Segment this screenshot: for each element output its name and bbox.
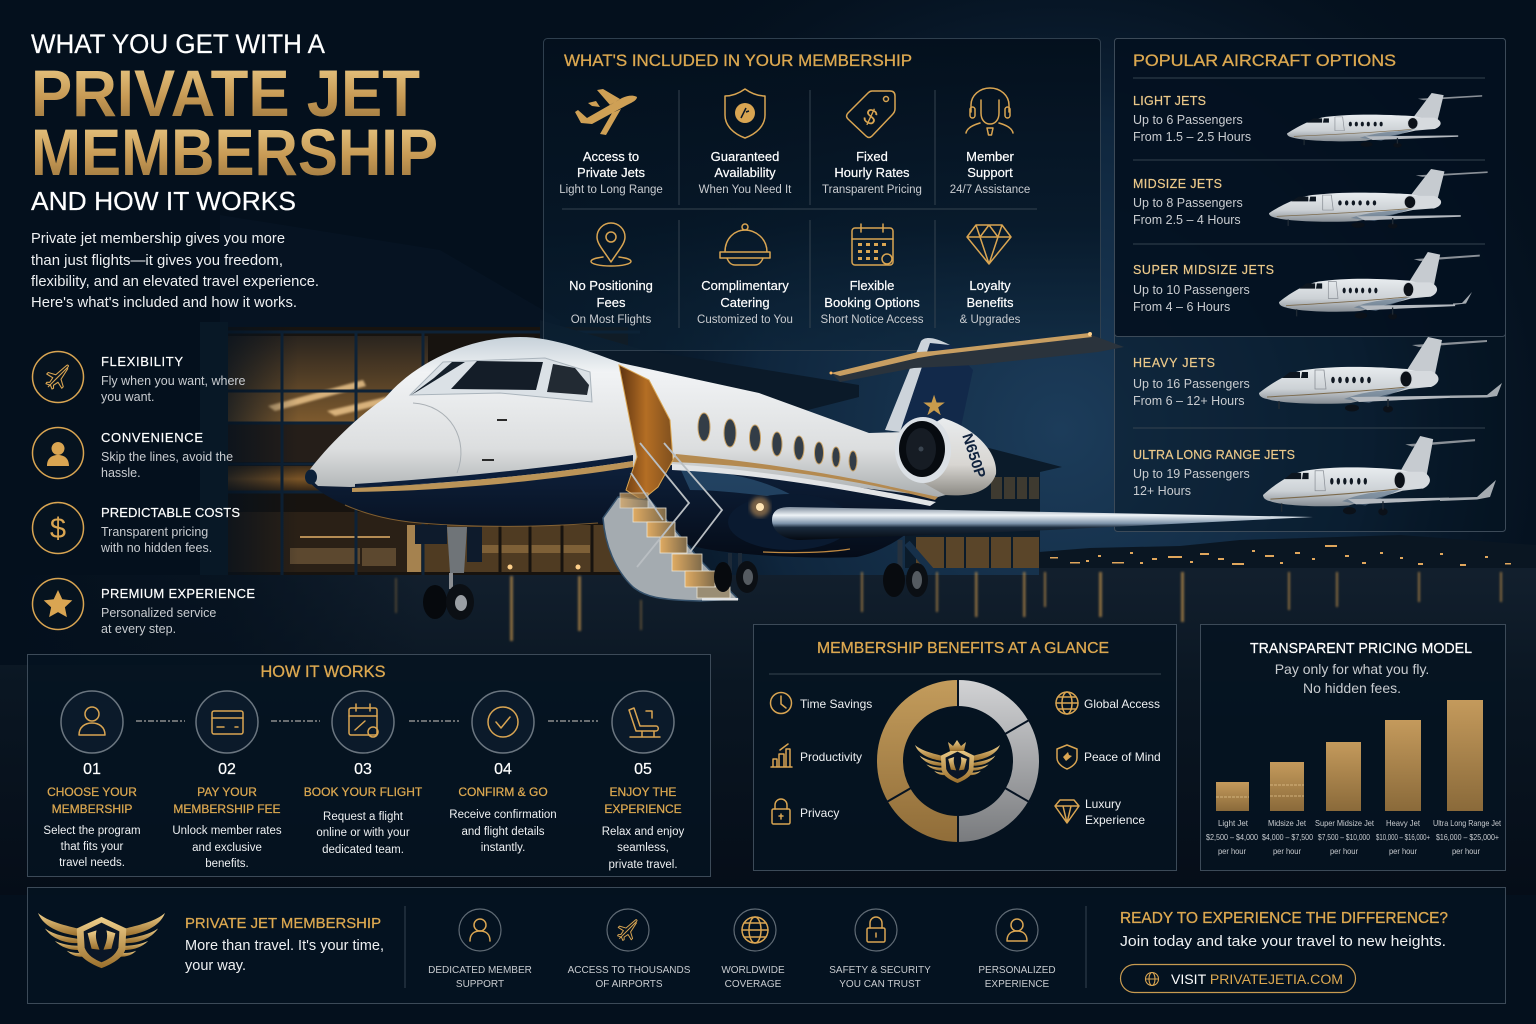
feature: premium experience: at every step. [101,622,176,636]
intro paragraph: Here's what's included and how it works. [31,295,297,311]
benefit: productivity: Productivity [800,750,862,764]
engine [895,417,996,495]
bar chart: Super Midsize Jet [1315,818,1375,828]
item: flexible booking options: Booking Options [824,295,920,310]
aircraft: super midsize jets: From 4 – 6 Hours [1133,300,1230,314]
aircraft: heavy jets: From 6 – 12+ Hours [1133,394,1245,408]
item: guaranteed availability: Availability [714,165,776,180]
panel subheading: No hidden fees. [1303,680,1401,696]
footer: safety and security: YOU CAN TRUST [839,979,921,990]
feature: convenience: CONVENIENCE [101,430,203,445]
aircraft: midsize jets: From 2.5 – 4 Hours [1133,213,1241,227]
panel heading: MEMBERSHIP BENEFITS AT A GLANCE [817,640,1109,657]
item: fixed hourly rates: Transparent Pricing [822,184,922,196]
item: flexible booking options: Flexible [850,278,894,293]
step 04: Receive confirmation [449,809,557,821]
wet tarmac with reflections [0,568,1536,895]
item: fixed hourly rates: $ [860,103,881,131]
upper terminal roof [540,320,859,412]
panel subheading: Pay only for what you fly. [1275,661,1429,677]
item: fixed hourly rates: Fixed [856,149,888,164]
aircraft: light jets: Up to 6 Passengers [1133,113,1243,127]
feature: flexibility: FLEXIBILITY [101,354,183,369]
feature: flexibility [32,352,246,404]
benefit: privacy: Privacy [800,806,839,820]
step 01: travel needs. [59,857,125,869]
item: no positioning fees: Fees [597,295,626,310]
footer: access to airports: ACCESS TO THOUSANDS [568,965,691,976]
footer: personalized experience [978,909,1056,990]
aircraft: heavy jets: Up to 16 Passengers [1133,377,1250,391]
bar chart: per hour [1218,846,1246,856]
aircraft: super midsize jets [1133,252,1480,320]
step 05 [602,691,684,871]
feature: flexibility: you want. [101,390,155,404]
item: guaranteed availability: Guaranteed [711,149,779,164]
donut chart [885,678,1031,844]
panel heading: POPULAR AIRCRAFT OPTIONS [1133,51,1396,70]
item: flexible booking options: Short Notice Access [821,314,924,326]
connectors between steps [136,720,598,722]
visit button [1120,964,1356,992]
aircraft: ultra long range jets [1133,436,1496,515]
right terminal and city lights [905,447,1536,568]
title block [31,29,438,216]
center logo [915,745,1000,783]
fuselage [306,337,965,497]
panel: what's included [544,38,1100,350]
step 04: instantly. [481,842,525,854]
main door [619,365,673,500]
tail fin and stabilizer: ★ [921,390,947,421]
step 03: dedicated team. [322,844,404,856]
aircraft: midsize jets: Up to 8 Passengers [1133,196,1243,210]
benefit: luxury experience: Luxury [1085,797,1121,811]
bar chart: Midsize Jet [1268,818,1307,828]
bar chart: Heavy Jet [1386,818,1421,828]
step 03: Request a flight [323,811,404,823]
brand tagline: More than travel. It's your time, [185,938,384,954]
bar chart: per hour [1452,846,1480,856]
item: no positioning fees [569,223,653,326]
intro paragraph: flexibility, and an elevated travel experience. [31,274,319,290]
footer: dedicated member support: DEDICATED MEMBER [428,965,532,976]
boarding stairs [603,443,738,601]
feature: flexibility: Fly when you want, where [101,374,246,388]
feature: premium experience [32,578,255,636]
step 05: EXPERIENCE [604,802,682,816]
step 01 [43,691,141,869]
item: loyalty benefits [960,225,1021,326]
bar chart: Light Jet [1218,818,1249,828]
step 05: seamless, [617,842,669,854]
panel: how it works [28,654,710,876]
bar chart: per hour [1273,846,1301,856]
call to action: READY TO EXPERIENCE THE DIFFERENCE? [1120,910,1448,927]
center crown [948,740,966,751]
intro paragraph [31,231,319,311]
cockpit windows [410,358,592,402]
item: access to private jets: Private Jets [577,165,645,180]
item: fixed hourly rates [822,91,922,196]
bar chart: $7,500 – $10,000 [1318,832,1370,842]
item: complimentary catering: Complimentary [701,278,789,293]
item: member support: Member [966,149,1015,164]
footer: dedicated member support: SUPPORT [456,979,504,990]
feature list [32,352,255,636]
footer: personalized experience: PERSONALIZED [978,965,1056,976]
footer: worldwide coverage: COVERAGE [725,979,782,990]
aircraft: midsize jets [1133,169,1488,229]
panel: membership benefits at a glance [754,624,1176,870]
step 04: and flight details [461,826,545,838]
step 02: PAY YOUR [197,785,257,799]
item: guaranteed availability: When You Need It [699,184,792,196]
footer: dedicated member support [428,909,532,990]
aircraft: super midsize jets: SUPER MIDSIZE JETS [1133,263,1274,277]
title block: PRIVATE JET [31,56,420,130]
item: access to private jets: Access to [583,149,639,164]
step 02: and exclusive [192,842,262,854]
step 01: Select the program [43,825,141,837]
title block: WHAT YOU GET WITH A [31,29,325,59]
item: loyalty benefits: Loyalty [969,278,1011,293]
feature: predictable costs: Transparent pricing [101,525,208,539]
intro paragraph: Private jet membership gives you more [31,231,285,247]
bar chart: Ultra Long Range Jet [1433,818,1502,828]
panel: transparent pricing model [1200,624,1506,870]
item: complimentary catering [697,224,793,326]
aircraft: light jets: LIGHT JETS [1133,94,1206,108]
aircraft: ultra long range jets: ULTRA LONG RANGE JETS [1133,448,1295,462]
belly [306,450,938,558]
footer: safety and security [829,909,931,990]
step 05: ENJOY THE [610,785,676,799]
item: guaranteed availability [699,89,792,196]
footer: safety and security: SAFETY & SECURITY [829,965,931,976]
benefit: global access: Global Access [1084,697,1160,711]
footer: worldwide coverage: WORLDWIDE [721,965,785,976]
panel heading: TRANSPARENT PRICING MODEL [1250,641,1472,657]
item: member support: Support [967,165,1013,180]
feature: predictable costs: PREDICTABLE COSTS [101,505,240,520]
feature: convenience: hassle. [101,466,141,480]
item: member support: 24/7 Assistance [950,184,1030,196]
panel: popular aircraft options [1114,38,1506,532]
item: complimentary catering: Customized to You [697,314,793,326]
panel heading: WHAT'S INCLUDED IN YOUR MEMBERSHIP [564,51,912,70]
tail fin and stabilizer [830,332,1124,432]
step 04: 04 [494,761,512,778]
aircraft: light jets [1133,93,1482,148]
item: complimentary catering: Catering [720,295,770,310]
bar chart [1206,700,1502,856]
aircraft: ultra long range jets: 12+ Hours [1133,484,1191,498]
brand tagline: PRIVATE JET MEMBERSHIP [185,916,381,932]
step 05: private travel. [608,859,678,871]
aircraft: super midsize jets: Up to 10 Passengers [1133,283,1250,297]
step 03: online or with your [316,827,410,839]
item: access to private jets: Light to Long Range [559,184,663,196]
brand tagline: your way. [185,958,246,974]
wing [728,494,1313,550]
benefit: peace of mind: Peace of Mind [1084,750,1161,764]
aircraft: heavy jets: HEAVY JETS [1133,356,1215,370]
feature: predictable costs [32,502,240,555]
footer: personalized experience: EXPERIENCE [985,979,1050,990]
step 04: CONFIRM & GO [458,785,548,799]
feature: premium experience: PREMIUM EXPERIENCE [101,586,255,601]
call to action: Join today and take your travel to new heights. [1120,934,1446,950]
step 01: MEMBERSHIP [52,802,132,816]
feature: convenience: Skip the lines, avoid the [101,450,233,464]
benefit: luxury experience [1055,797,1145,827]
feature: convenience [32,428,233,480]
step 01: 01 [83,761,101,778]
intro paragraph: than just flights—it gives you freedom, [31,253,283,269]
aircraft: heavy jets [1133,337,1502,412]
item: member support [950,88,1030,196]
benefit: time savings: Time Savings [800,697,872,711]
feature: premium experience: Personalized service [101,606,216,620]
cabin windows [698,413,857,471]
aircraft: light jets: From 1.5 – 2.5 Hours [1133,130,1251,144]
item: loyalty benefits: & Upgrades [960,314,1021,326]
large private jet [305,332,1313,620]
title block: MEMBERSHIP [31,115,438,189]
bar chart: $10,000 – $16,000+ [1376,832,1430,842]
step 02: Unlock member rates [172,825,282,837]
step 05: 05 [634,761,652,778]
feature: predictable costs: with no hidden fees. [100,541,212,555]
step 01: CHOOSE YOUR [47,785,137,799]
landing gear [415,525,933,620]
bar chart: $16,000 – $25,000+ [1436,832,1499,842]
step 02 [172,691,282,870]
step 02: 02 [218,761,236,778]
aircraft: midsize jets: MIDSIZE JETS [1133,177,1222,191]
step 03 [304,691,423,856]
call to action [1120,910,1448,992]
footer logo [38,913,165,968]
benefit: luxury experience: Experience [1085,813,1145,827]
footer band [28,888,1506,1004]
step 03: BOOK YOUR FLIGHT [304,785,423,799]
bar chart: $2,500 – $4,000 [1206,832,1258,842]
item: no positioning fees: On Most Flights [571,314,652,326]
step 03: 03 [354,761,372,778]
bar chart: per hour [1330,846,1358,856]
engine: N650P [958,431,989,480]
footer: access to airports [568,909,691,990]
footer: access to airports: OF AIRPORTS [595,979,663,990]
panel heading: HOW IT WORKS [260,663,386,681]
step 02: MEMBERSHIP FEE [173,802,281,816]
benefit: peace of mind [1057,745,1161,769]
step 02: benefits. [205,858,249,870]
visit button: VISIT PRIVATEJETIA.COM [1171,972,1343,987]
aircraft: ultra long range jets: Up to 19 Passengers [1133,467,1250,481]
benefit: privacy [772,799,839,824]
item: fixed hourly rates: Hourly Rates [834,165,910,180]
benefit: productivity [771,744,862,767]
step 05: Relax and enjoy [602,826,684,838]
cheatlines [355,455,633,487]
benefit: global access [1056,692,1160,714]
step 01: that fits your [61,841,123,853]
step 04 [449,691,557,854]
benefit: time savings [770,692,872,714]
panel subheading [1275,661,1429,696]
item: loyalty benefits: Benefits [967,295,1014,310]
terminal building glass wall [200,322,640,577]
bar chart: $4,000 – $7,500 [1262,832,1313,842]
bar chart: per hour [1389,846,1417,856]
item: no positioning fees: No Positioning [569,278,653,293]
item: flexible booking options [821,224,924,326]
title block: AND HOW IT WORKS [31,186,296,216]
item: access to private jets [559,89,663,196]
footer: worldwide coverage [721,909,785,990]
brand tagline [185,916,384,974]
feature: predictable costs: $ [50,513,66,545]
